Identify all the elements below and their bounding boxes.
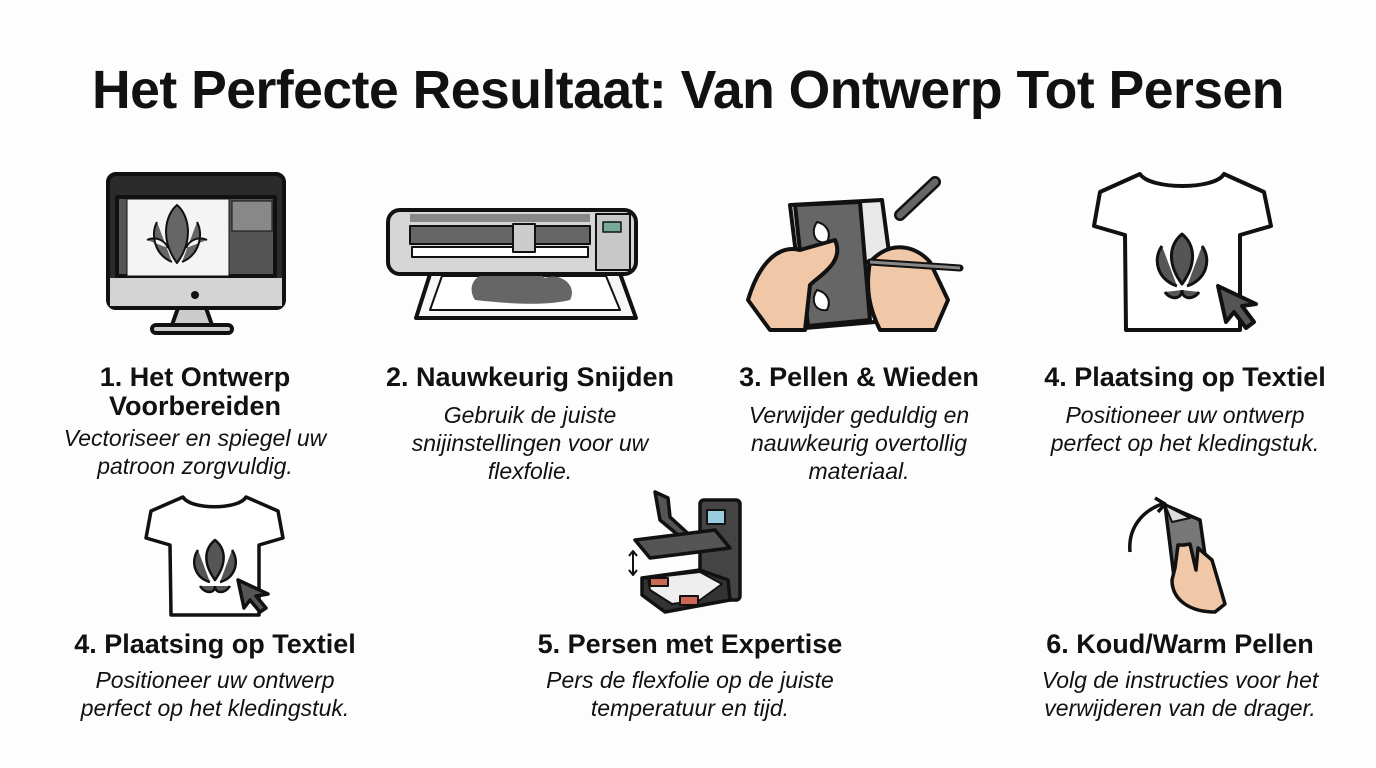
icon: t-shirt with cursor (row 2) [146,497,283,615]
step 5 heading: 5. Persen met Expertise [538,629,842,659]
step 4 (row 2) [74,629,356,721]
icon: monitor [108,174,284,333]
step 4 heading: 4. Plaatsing op Textiel [1044,362,1326,392]
step 3 text [749,402,969,484]
step 5 [538,629,842,721]
icon: t-shirt with cursor (row 1) [1094,174,1271,330]
step 1 text: Vectoriseer en spiegel uw [64,425,326,451]
step 2 text [412,402,650,484]
step 1 text: patroon zorgvuldig. [97,453,293,479]
step 1 heading: 1. Het Ontwerp [100,362,290,392]
step 3 [739,362,979,484]
step 4b text: Positioneer uw ontwerp [95,667,335,693]
step 1 heading: Voorbereiden [109,391,281,421]
step 3 text: nauwkeurig overtollig [751,430,967,456]
step 6 text [1042,667,1320,721]
step 3 text: Verwijder geduldig en [749,402,969,428]
step 4 text [1050,402,1319,456]
step 5 text [546,667,834,721]
step 2 text: snijinstellingen voor uw [412,430,648,456]
step 4b text [80,667,349,721]
step 3 text: materiaal. [808,458,909,484]
icon: cutting plotter [388,210,636,318]
step 1 text [64,425,328,479]
step 1 heading [100,362,290,421]
step 5 text: temperatuur en tijd. [591,695,789,721]
step 6 text: Volg de instructies voor het [1042,667,1318,693]
step 4 [1044,362,1326,456]
step 4 text: Positioneer uw ontwerp [1065,402,1305,428]
step 6 [1042,629,1320,721]
step 4 text: perfect op het kledingstuk. [1051,430,1319,456]
step 1 [64,362,328,479]
step 2 [386,362,674,484]
step 2 text: flexfolie. [488,458,572,484]
step 4b text: perfect op het kledingstuk. [81,695,349,721]
step 5 text: Pers de flexfolie op de juiste [546,667,834,693]
icon: peeling hands [748,182,960,330]
step 6 heading: 6. Koud/Warm Pellen [1046,629,1314,659]
step 4b heading: 4. Plaatsing op Textiel [74,629,356,659]
icon: heat press [629,492,740,612]
step 2 text: Gebruik de juiste [444,402,616,428]
step 2 heading: 2. Nauwkeurig Snijden [386,362,674,392]
title: Het Perfecte Resultaat: Van Ontwerp Tot Persen [92,61,1284,120]
icon: peeling hand [1130,498,1225,612]
step 3 heading: 3. Pellen & Wieden [739,362,979,392]
step 6 text: verwijderen van de drager. [1044,695,1316,721]
